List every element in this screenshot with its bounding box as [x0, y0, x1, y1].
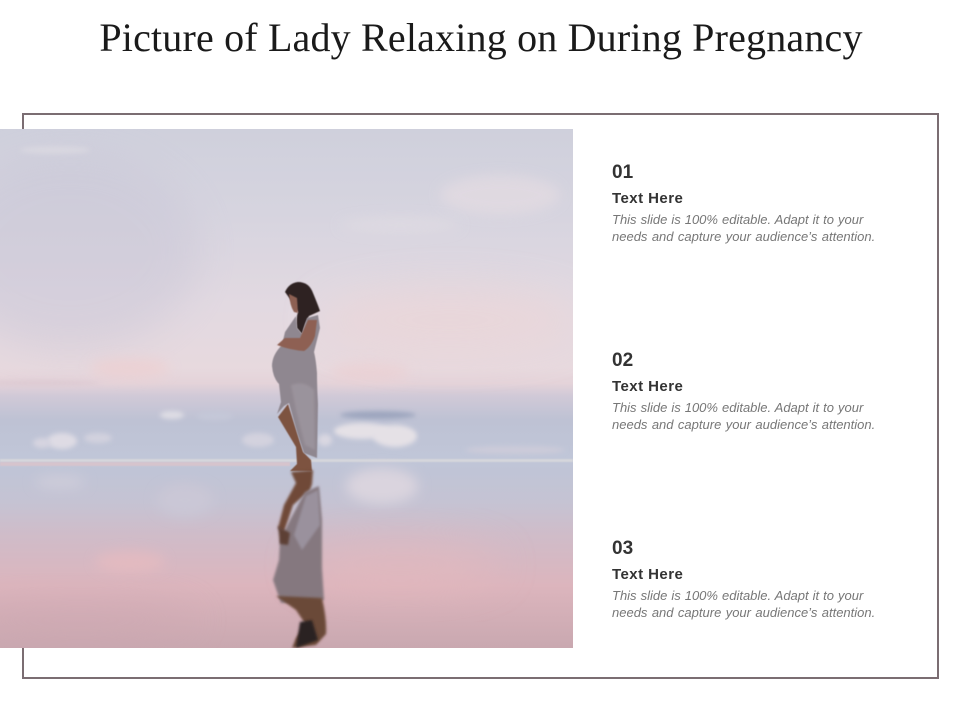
heading: Text Here [612, 566, 683, 583]
hair [285, 282, 320, 334]
description [612, 212, 875, 244]
text block 01 [612, 162, 875, 244]
description: needs and capture your audience’s attention. [612, 604, 875, 620]
description: This slide is 100% editable. Adapt it to your [612, 212, 863, 227]
soft sky tints [0, 146, 580, 386]
description [612, 400, 875, 432]
heading: Text Here [612, 190, 683, 207]
reflected feet and leg [278, 470, 313, 532]
description [612, 588, 875, 620]
woman reflection [273, 470, 326, 648]
woman figure [272, 282, 320, 471]
cloud reflections [0, 468, 500, 638]
reflected dress [273, 486, 324, 603]
sky and water background [0, 129, 573, 648]
title: Picture of Lady Relaxing on During Pregnancy [99, 15, 863, 60]
back leg [278, 404, 312, 471]
reflected upper highlight [294, 490, 320, 550]
number: 02 [612, 350, 633, 370]
clouds above horizon [33, 411, 565, 454]
dress highlight [291, 383, 315, 450]
arm [277, 320, 317, 351]
panel frame [22, 113, 939, 679]
number: 01 [612, 162, 633, 182]
description: This slide is 100% editable. Adapt it to your [612, 400, 863, 415]
horizon line [0, 459, 573, 466]
description: needs and capture your audience’s attention. [612, 416, 875, 432]
number: 03 [612, 538, 633, 558]
photo: pregnant woman standing on reflective beach [0, 129, 573, 648]
reflected hair [276, 596, 326, 648]
heading: Text Here [612, 378, 683, 395]
dress [272, 315, 320, 458]
text block 02 [612, 350, 875, 432]
face [289, 294, 298, 313]
text block 03 [612, 538, 875, 620]
description: needs and capture your audience’s attention. [612, 228, 875, 244]
reflected shadow arm [278, 526, 290, 545]
description: This slide is 100% editable. Adapt it to your [612, 588, 863, 603]
